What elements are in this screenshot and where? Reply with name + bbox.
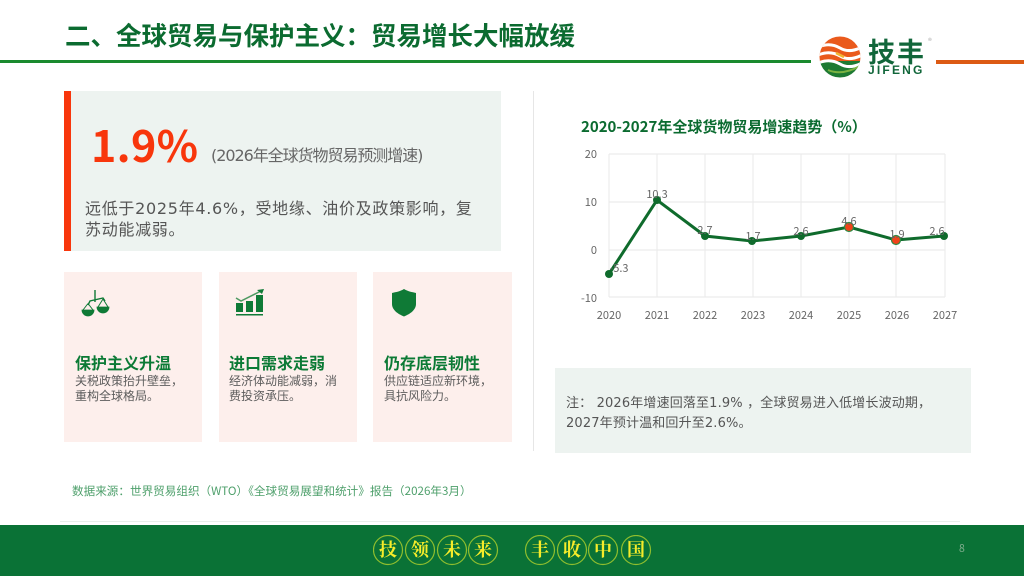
y axis labels: 10 bbox=[585, 194, 597, 210]
x axis labels: 2026 bbox=[885, 307, 909, 323]
slogan seals: 中 bbox=[594, 536, 612, 562]
card text: import demand: 经济体动能减弱，消 bbox=[229, 372, 337, 389]
slogan seals: 收 bbox=[563, 536, 581, 562]
x axis labels: 2024 bbox=[789, 307, 813, 323]
y axis labels: -10 bbox=[581, 290, 597, 306]
x axis labels: 2025 bbox=[837, 307, 861, 323]
note text: 注： 2026年增速回落至1.9% ，全球贸易进入低增长波动期， bbox=[566, 396, 931, 411]
data labels: -5.3 bbox=[609, 260, 629, 276]
card text: resilience bbox=[384, 372, 492, 404]
y axis labels bbox=[581, 146, 597, 306]
data source: 数据来源：世界贸易组织（WTO）《全球贸易展望和统计》报告（2026年3月） bbox=[72, 483, 472, 499]
data labels: 2.6 bbox=[929, 223, 945, 239]
logo mark bbox=[820, 36, 860, 78]
data labels: 2.7 bbox=[697, 222, 713, 238]
vertical divider bbox=[533, 91, 534, 451]
card text: protectionism: 重构全球格局。 bbox=[75, 387, 159, 404]
trend line bbox=[609, 200, 944, 274]
accent bar bbox=[64, 91, 71, 251]
title: 二、全球贸易与保护主义：贸易增长大幅放缓 bbox=[65, 16, 575, 53]
slogan seals: 未 bbox=[443, 536, 461, 562]
footer hairline bbox=[60, 521, 960, 522]
header rule: orange bbox=[936, 60, 1024, 64]
big number caption: (2026年全球货物贸易预测增速) bbox=[211, 146, 422, 165]
x axis labels: 2023 bbox=[741, 307, 765, 323]
y axis labels: 0 bbox=[591, 242, 597, 258]
x axis labels bbox=[597, 307, 957, 323]
x axis labels: 2021 bbox=[645, 307, 669, 323]
data labels: 10.3 bbox=[646, 186, 668, 202]
x axis labels: 2020 bbox=[597, 307, 621, 323]
slogan seals: 技 bbox=[379, 536, 397, 562]
data labels: 2.6 bbox=[793, 223, 809, 239]
slogan seals: 来 bbox=[474, 536, 492, 562]
data labels: 1.7 bbox=[745, 228, 761, 244]
panel: resilience bbox=[373, 272, 512, 442]
x axis labels: 2027 bbox=[933, 307, 957, 323]
card text: resilience: 供应链适应新环境， bbox=[384, 372, 492, 389]
logo bbox=[820, 31, 932, 78]
icon: scales bbox=[82, 290, 110, 316]
slogan seals bbox=[373, 535, 652, 566]
icon: rising bars bbox=[236, 289, 264, 316]
note text bbox=[566, 396, 931, 431]
slogan seals: 丰 bbox=[531, 536, 549, 562]
logo wordmark: 技丰 bbox=[868, 31, 926, 70]
data labels: 1.9 bbox=[889, 226, 905, 242]
data labels bbox=[609, 186, 945, 276]
description: 苏动能减弱。 bbox=[85, 220, 185, 239]
line chart bbox=[581, 146, 957, 323]
card text: protectionism bbox=[75, 372, 183, 404]
data labels: 4.6 bbox=[841, 213, 857, 229]
card text: import demand: 费投资承压。 bbox=[229, 387, 301, 404]
header rule: green bbox=[0, 60, 811, 63]
panel: import demand bbox=[219, 272, 357, 442]
description: 远低于2025年4.6%，受地缘、油价及政策影响，复 bbox=[85, 199, 473, 218]
note text: 2027年预计温和回升至2.6%。 bbox=[566, 416, 752, 431]
icon: shield bbox=[392, 289, 416, 316]
chart title: 2020-2027年全球货物贸易增速趋势（%） bbox=[581, 116, 867, 137]
panel: protectionism bbox=[64, 272, 202, 442]
card text: import demand bbox=[229, 372, 337, 404]
card text: resilience: 具抗风险力。 bbox=[384, 387, 456, 404]
description bbox=[85, 199, 473, 239]
y axis labels: 20 bbox=[585, 146, 597, 162]
page number: 8 bbox=[959, 541, 965, 556]
registered mark: ® bbox=[928, 36, 932, 47]
panel: key figure bbox=[64, 91, 501, 251]
note box bbox=[555, 368, 971, 453]
card heading: resilience: 仍存底层韧性 bbox=[384, 350, 480, 374]
footer band bbox=[0, 525, 1024, 576]
x axis labels: 2022 bbox=[693, 307, 717, 323]
slogan seals: 国 bbox=[627, 536, 645, 562]
card text: protectionism: 关税政策抬升壁垒， bbox=[75, 372, 183, 389]
card heading: protectionism: 保护主义升温 bbox=[75, 350, 171, 374]
slogan seals: 领 bbox=[411, 536, 430, 562]
footer slogan bbox=[373, 535, 652, 566]
card heading: import demand: 进口需求走弱 bbox=[229, 350, 325, 374]
data points bbox=[605, 196, 948, 278]
highlighted points bbox=[844, 222, 900, 244]
big number: 1.9% bbox=[91, 113, 198, 175]
logo latin wordmark: JIFENG bbox=[868, 63, 925, 77]
